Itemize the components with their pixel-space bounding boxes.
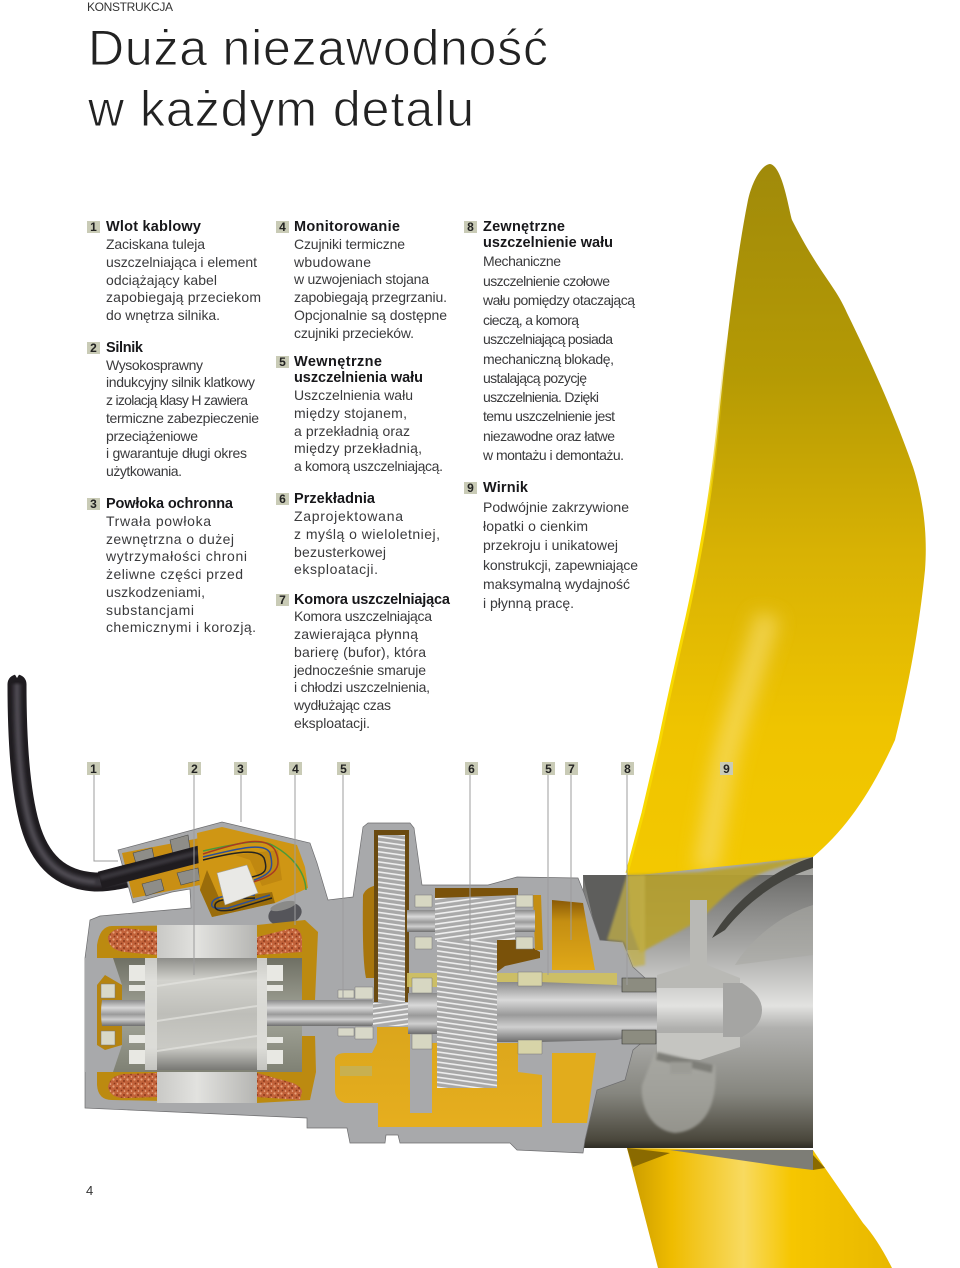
text block 5: internal shaft seals: a przekładnią oraz xyxy=(294,423,410,439)
text block 2: motor: użytkowania. xyxy=(106,463,182,479)
callout numbers with leader lines: 8 xyxy=(624,762,631,776)
callout numbers with leader lines: 4 xyxy=(292,762,299,776)
title: w każdym detalu xyxy=(87,81,474,137)
text block 8: external shaft seal: uszczelnienia. Dzięki xyxy=(483,389,599,405)
title xyxy=(87,20,548,137)
text block 8: external shaft seal xyxy=(464,219,635,463)
text block 8: external shaft seal: uszczelnienie czołowe xyxy=(483,273,610,289)
illustration: propeller hub xyxy=(583,857,825,1170)
text block 8: external shaft seal: ustalającą pozycję xyxy=(483,370,587,386)
text block 4: monitoring: 4 xyxy=(279,220,286,234)
motor shaft xyxy=(101,1000,376,1026)
bearings xyxy=(412,895,533,1049)
illustration: terminal box with wiring xyxy=(197,827,308,929)
hub nut xyxy=(723,983,762,1037)
text block 6: gearbox: bezusterkowej xyxy=(294,544,386,560)
text block 5: internal shaft seals xyxy=(276,354,443,474)
text block 8: external shaft seal: niezawodne oraz łatwe xyxy=(483,428,615,444)
bolt xyxy=(340,1066,372,1076)
coil bottom right xyxy=(257,1073,302,1100)
callout numbers with leader lines: 2 xyxy=(191,762,198,776)
text block 9: impeller: konstrukcji, zapewniające xyxy=(483,557,638,573)
text block 2: motor: i gwarantuje długi okres xyxy=(106,445,247,461)
translucent blade over hub xyxy=(628,857,813,953)
illustration: pinion and helical gear xyxy=(373,895,657,1088)
intermediate shafts xyxy=(407,910,435,932)
text block 5: internal shaft seals: Wewnętrzne xyxy=(294,354,382,370)
callout numbers with leader lines: 1 xyxy=(90,762,97,776)
rotor rings and streaks xyxy=(145,958,267,1070)
illustration: lower propeller blade xyxy=(627,1148,892,1268)
text block 1: cable entry: Zaciskana tuleja xyxy=(106,236,205,252)
text block 1: cable entry xyxy=(87,219,261,323)
callout numbers with leader lines: 6 xyxy=(468,762,475,776)
seal chamber 7 xyxy=(552,900,595,970)
text block 9: impeller xyxy=(464,480,638,611)
callout numbers with leader lines: 5 xyxy=(545,762,552,776)
rotor xyxy=(145,958,267,1070)
text block 1: cable entry: do wnętrza silnika. xyxy=(106,307,220,323)
text block 7: seal chamber: 7 xyxy=(279,593,286,607)
rotor cavity xyxy=(113,958,302,1072)
text block 2: motor: termiczne zabezpieczenie xyxy=(106,410,259,426)
coil top right xyxy=(257,928,302,955)
text block 7: seal chamber: i chłodzi uszczelnienia, xyxy=(294,679,430,695)
text block 6: gearbox xyxy=(276,491,440,577)
text block 8: external shaft seal: wału pomiędzy otaczającą xyxy=(482,292,635,308)
callout numbers with leader lines: 7 xyxy=(568,762,575,776)
callout numbers with leader lines: 5 xyxy=(340,762,347,776)
mechanical seal xyxy=(622,978,656,1044)
text block 1: cable entry: 1 xyxy=(90,220,97,234)
hub lower rim xyxy=(670,1150,813,1170)
text block 6: gearbox: eksploatacji. xyxy=(294,561,378,577)
text block 3: protective coating: zewnętrzna o dużej xyxy=(106,531,234,547)
text block 8: external shaft seal: 8 xyxy=(467,220,474,234)
text block 9: impeller: przekroju i unikatowej xyxy=(483,537,618,553)
text block 3: protective coating: Powłoka ochronna xyxy=(106,496,234,512)
oil level band xyxy=(407,973,617,987)
text block 6: gearbox: Przekładnia xyxy=(294,491,376,507)
text block 9: impeller: i płynną pracę. xyxy=(483,595,574,611)
text block 5: internal shaft seals: 5 xyxy=(279,355,286,369)
title: Duża niezawodność xyxy=(88,20,548,76)
text block 6: gearbox: 6 xyxy=(279,492,286,506)
text block 3: protective coating: Trwała powłoka xyxy=(106,513,211,529)
illustration: power cable xyxy=(14,673,205,882)
text block 3: protective coating: chemicznymi i korozją. xyxy=(106,619,256,635)
text block 7: seal chamber: Komora uszczelniająca xyxy=(294,608,432,624)
text block 4: monitoring xyxy=(276,219,447,341)
text block 7: seal chamber: barierę (bufor), która xyxy=(294,644,426,660)
text block 2: motor: Silnik xyxy=(106,340,144,356)
text block 2: motor: 2 xyxy=(90,341,97,355)
text block 9: impeller: łopatki o cienkim xyxy=(483,518,588,534)
text block 3: protective coating xyxy=(87,496,256,635)
white connector xyxy=(217,865,258,905)
illustration: motor chamber xyxy=(85,920,376,1103)
hub blade root bulb xyxy=(642,1052,716,1133)
text block 7: seal chamber: eksploatacji. xyxy=(294,715,370,731)
text block 3: protective coating: 3 xyxy=(90,497,97,511)
text block 7: seal chamber: zawierająca płynną xyxy=(294,626,418,642)
hub shaft support web xyxy=(657,900,740,988)
coil bottom left xyxy=(108,1073,157,1098)
text block 4: monitoring: w uzwojeniach stojana xyxy=(293,271,429,287)
right wall xyxy=(302,1000,315,1036)
text block 8: external shaft seal: cieczą, a komorą xyxy=(483,312,579,328)
section label: KONSTRUKCJA xyxy=(87,0,173,14)
text block 8: external shaft seal: mechaniczną blokadę, xyxy=(483,351,614,367)
text block 5: internal shaft seals: między przekładnią, xyxy=(294,440,422,456)
illustration: large gear xyxy=(363,830,409,1002)
text block 8: external shaft seal: w montażu i demontażu. xyxy=(482,447,624,463)
text block 4: monitoring: Opcjonalnie są dostępne xyxy=(294,307,447,323)
text block 2: motor xyxy=(87,340,259,479)
text block 6: gearbox: Zaprojektowana xyxy=(294,508,403,524)
illustration: cable gland xyxy=(100,835,200,898)
illustration: upper propeller blade xyxy=(607,164,926,960)
text block 4: monitoring: Czujniki termiczne xyxy=(294,236,405,252)
text block 5: internal shaft seals: Uszczelnienia wału xyxy=(294,387,413,403)
input pinion xyxy=(373,1003,408,1026)
text block 3: protective coating: substancjami xyxy=(106,602,194,618)
temperature sensor xyxy=(266,899,304,929)
text block 4: monitoring: wbudowane xyxy=(293,254,371,270)
text block 2: motor: przeciążeniowe xyxy=(106,428,198,444)
main shaft xyxy=(497,982,657,1042)
coil top left xyxy=(108,928,157,955)
page number: 4 xyxy=(86,1183,93,1198)
text block 9: impeller: Podwójnie zakrzywione xyxy=(483,499,629,515)
illustration: blade seen through hull xyxy=(607,875,645,967)
left bearing housing wall xyxy=(85,958,122,1072)
text block 2: motor: indukcyjny silnik klatkowy xyxy=(106,374,255,390)
hub lower casting xyxy=(657,1033,740,1060)
wires xyxy=(203,841,306,911)
callout numbers with leader lines: 3 xyxy=(237,762,244,776)
text block 8: external shaft seal: temu uszczelnienie jest xyxy=(483,408,615,424)
rotor end rings xyxy=(129,965,283,1064)
ball bearings xyxy=(101,984,373,1045)
text block 5: internal shaft seals: między stojanem, xyxy=(294,405,407,421)
text block 9: impeller: Wirnik xyxy=(483,480,529,496)
text block 5: internal shaft seals: a komorą uszczelniającą. xyxy=(294,458,443,474)
text block 9: impeller: 9 xyxy=(467,481,474,495)
text block 7: seal chamber: wydłużając czas xyxy=(293,697,391,713)
text block 4: monitoring: zapobiegają przegrzaniu. xyxy=(294,289,447,305)
text block 8: external shaft seal: Zewnętrzne xyxy=(483,219,565,235)
text block 1: cable entry: odciążający kabel xyxy=(106,272,217,288)
stator top xyxy=(157,925,257,958)
text block 1: cable entry: uszczelniająca i element xyxy=(106,254,257,270)
text block 8: external shaft seal: uszczelnienie wału xyxy=(483,235,613,251)
dark cavity above gear xyxy=(435,888,540,972)
text block 9: impeller: maksymalną wydajność xyxy=(483,576,630,592)
blade shadow under hub xyxy=(627,1148,825,1170)
text block 7: seal chamber xyxy=(276,592,451,731)
text block 7: seal chamber: jednocześnie smaruje xyxy=(293,662,426,678)
callout numbers with leader lines xyxy=(87,762,733,998)
hub light band xyxy=(735,905,813,965)
text block 4: monitoring: Monitorowanie xyxy=(294,219,400,235)
text block 2: motor: z izolacją klasy H zawiera xyxy=(106,392,248,408)
illustration: motor and gearbox housing xyxy=(85,822,645,1153)
text block 2: motor: Wysokosprawny xyxy=(106,357,203,373)
callout numbers with leader lines: 9 xyxy=(723,762,730,776)
text block 1: cable entry: zapobiegają przeciekom xyxy=(106,289,261,305)
stator bottom xyxy=(157,1072,257,1103)
main shaft bearings xyxy=(518,972,542,1054)
text block 3: protective coating: uszkodzeniami, xyxy=(106,584,205,600)
text block 4: monitoring: czujniki przecieków. xyxy=(294,325,414,341)
text block 8: external shaft seal: uszczelniającą posiada xyxy=(483,331,613,347)
text block 5: internal shaft seals: uszczelnienia wału xyxy=(294,370,423,386)
illustration: oil chambers xyxy=(335,888,617,1127)
text block 1: cable entry: Wlot kablowy xyxy=(106,219,201,235)
text block 8: external shaft seal: Mechaniczne xyxy=(483,253,561,269)
text block 7: seal chamber: Komora uszczelniająca xyxy=(294,592,451,608)
text block 3: protective coating: żeliwne części przed xyxy=(106,566,243,582)
dark hub recess xyxy=(712,857,813,938)
text block 6: gearbox: z myślą o wieloletniej, xyxy=(294,526,440,542)
text block 3: protective coating: wytrzymałości chroni xyxy=(105,548,247,564)
